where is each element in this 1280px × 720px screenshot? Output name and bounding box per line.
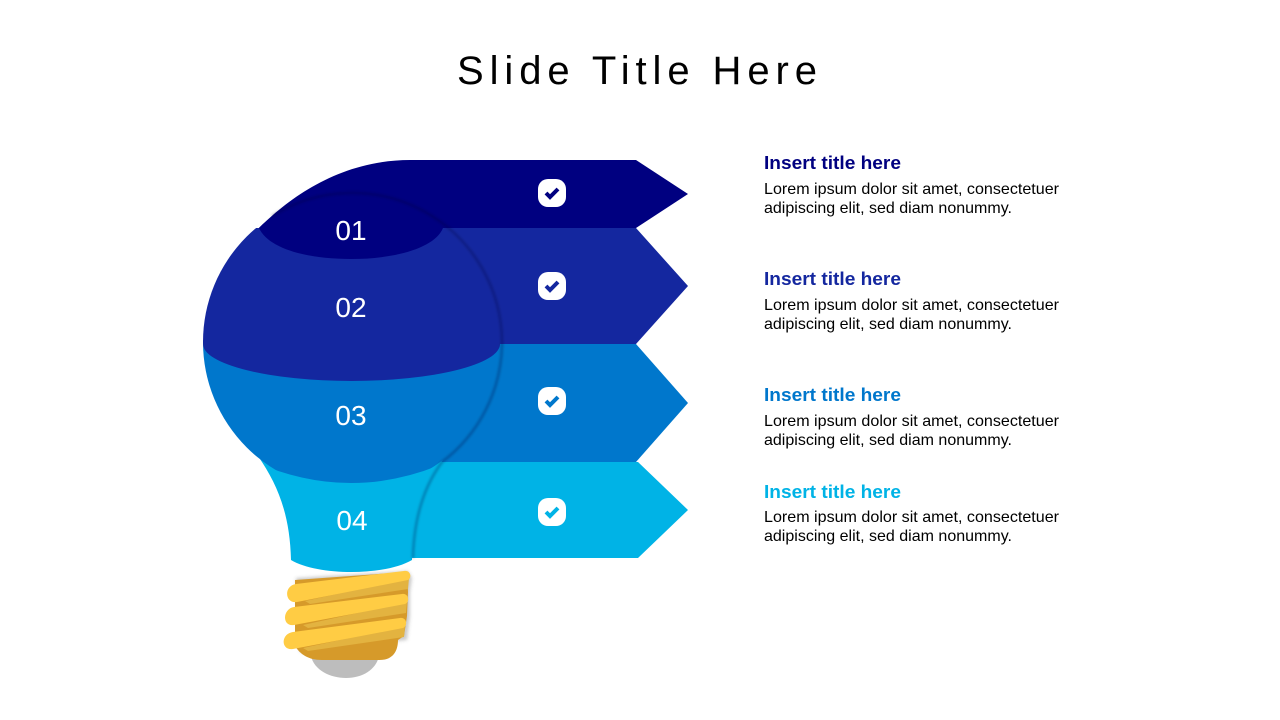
text block 1: Insert title here	[764, 153, 901, 173]
arrow banners	[255, 160, 688, 558]
screw base	[284, 571, 412, 678]
gold cap and thread backing	[295, 572, 408, 660]
text block 1	[764, 153, 1060, 217]
text block 4: Insert title here	[764, 482, 901, 502]
icon: check 2	[538, 272, 566, 300]
text block 2: adipiscing elit, sed diam nonummy.	[764, 316, 1012, 333]
label 02: 02	[335, 292, 367, 323]
text block 2	[764, 269, 1060, 333]
text block 2: Lorem ipsum dolor sit amet, consectetuer	[764, 297, 1060, 314]
icon: check 1	[538, 179, 566, 207]
text block 2: Insert title here	[764, 269, 901, 289]
label 04: 04	[336, 505, 368, 536]
thread 2	[285, 594, 408, 625]
arrow 2	[400, 228, 688, 344]
bulb section 04	[258, 456, 446, 572]
thread shade	[303, 578, 409, 651]
label 01: 01	[335, 215, 367, 246]
title: Slide Title Here	[457, 49, 817, 93]
text block 3: Insert title here	[764, 385, 901, 405]
text block 3: adipiscing elit, sed diam nonummy.	[764, 432, 1012, 449]
arrow 1	[255, 160, 688, 240]
grey tip	[311, 656, 379, 678]
text block 4: Lorem ipsum dolor sit amet, consectetuer	[764, 509, 1060, 526]
arrow 3	[400, 344, 688, 462]
text block 3: Lorem ipsum dolor sit amet, consectetuer	[764, 413, 1060, 430]
thread shadow	[296, 571, 412, 652]
icon: check 3	[538, 387, 566, 415]
icon: check 4	[538, 498, 566, 526]
light bulb	[190, 193, 512, 678]
bulb section 03	[203, 340, 446, 483]
thread 1	[287, 571, 410, 602]
bulb section 02	[190, 228, 512, 381]
bulb section 01	[259, 193, 443, 259]
bulb outline shadow	[272, 193, 502, 558]
thread 3	[284, 618, 406, 649]
text block 1: adipiscing elit, sed diam nonummy.	[764, 200, 1012, 217]
text block 1: Lorem ipsum dolor sit amet, consectetuer	[764, 181, 1060, 198]
text block 4	[764, 482, 1060, 545]
text block 3	[764, 385, 1060, 449]
label 03: 03	[335, 400, 367, 431]
text block 4: adipiscing elit, sed diam nonummy.	[764, 528, 1012, 545]
arrow 4	[400, 462, 688, 558]
